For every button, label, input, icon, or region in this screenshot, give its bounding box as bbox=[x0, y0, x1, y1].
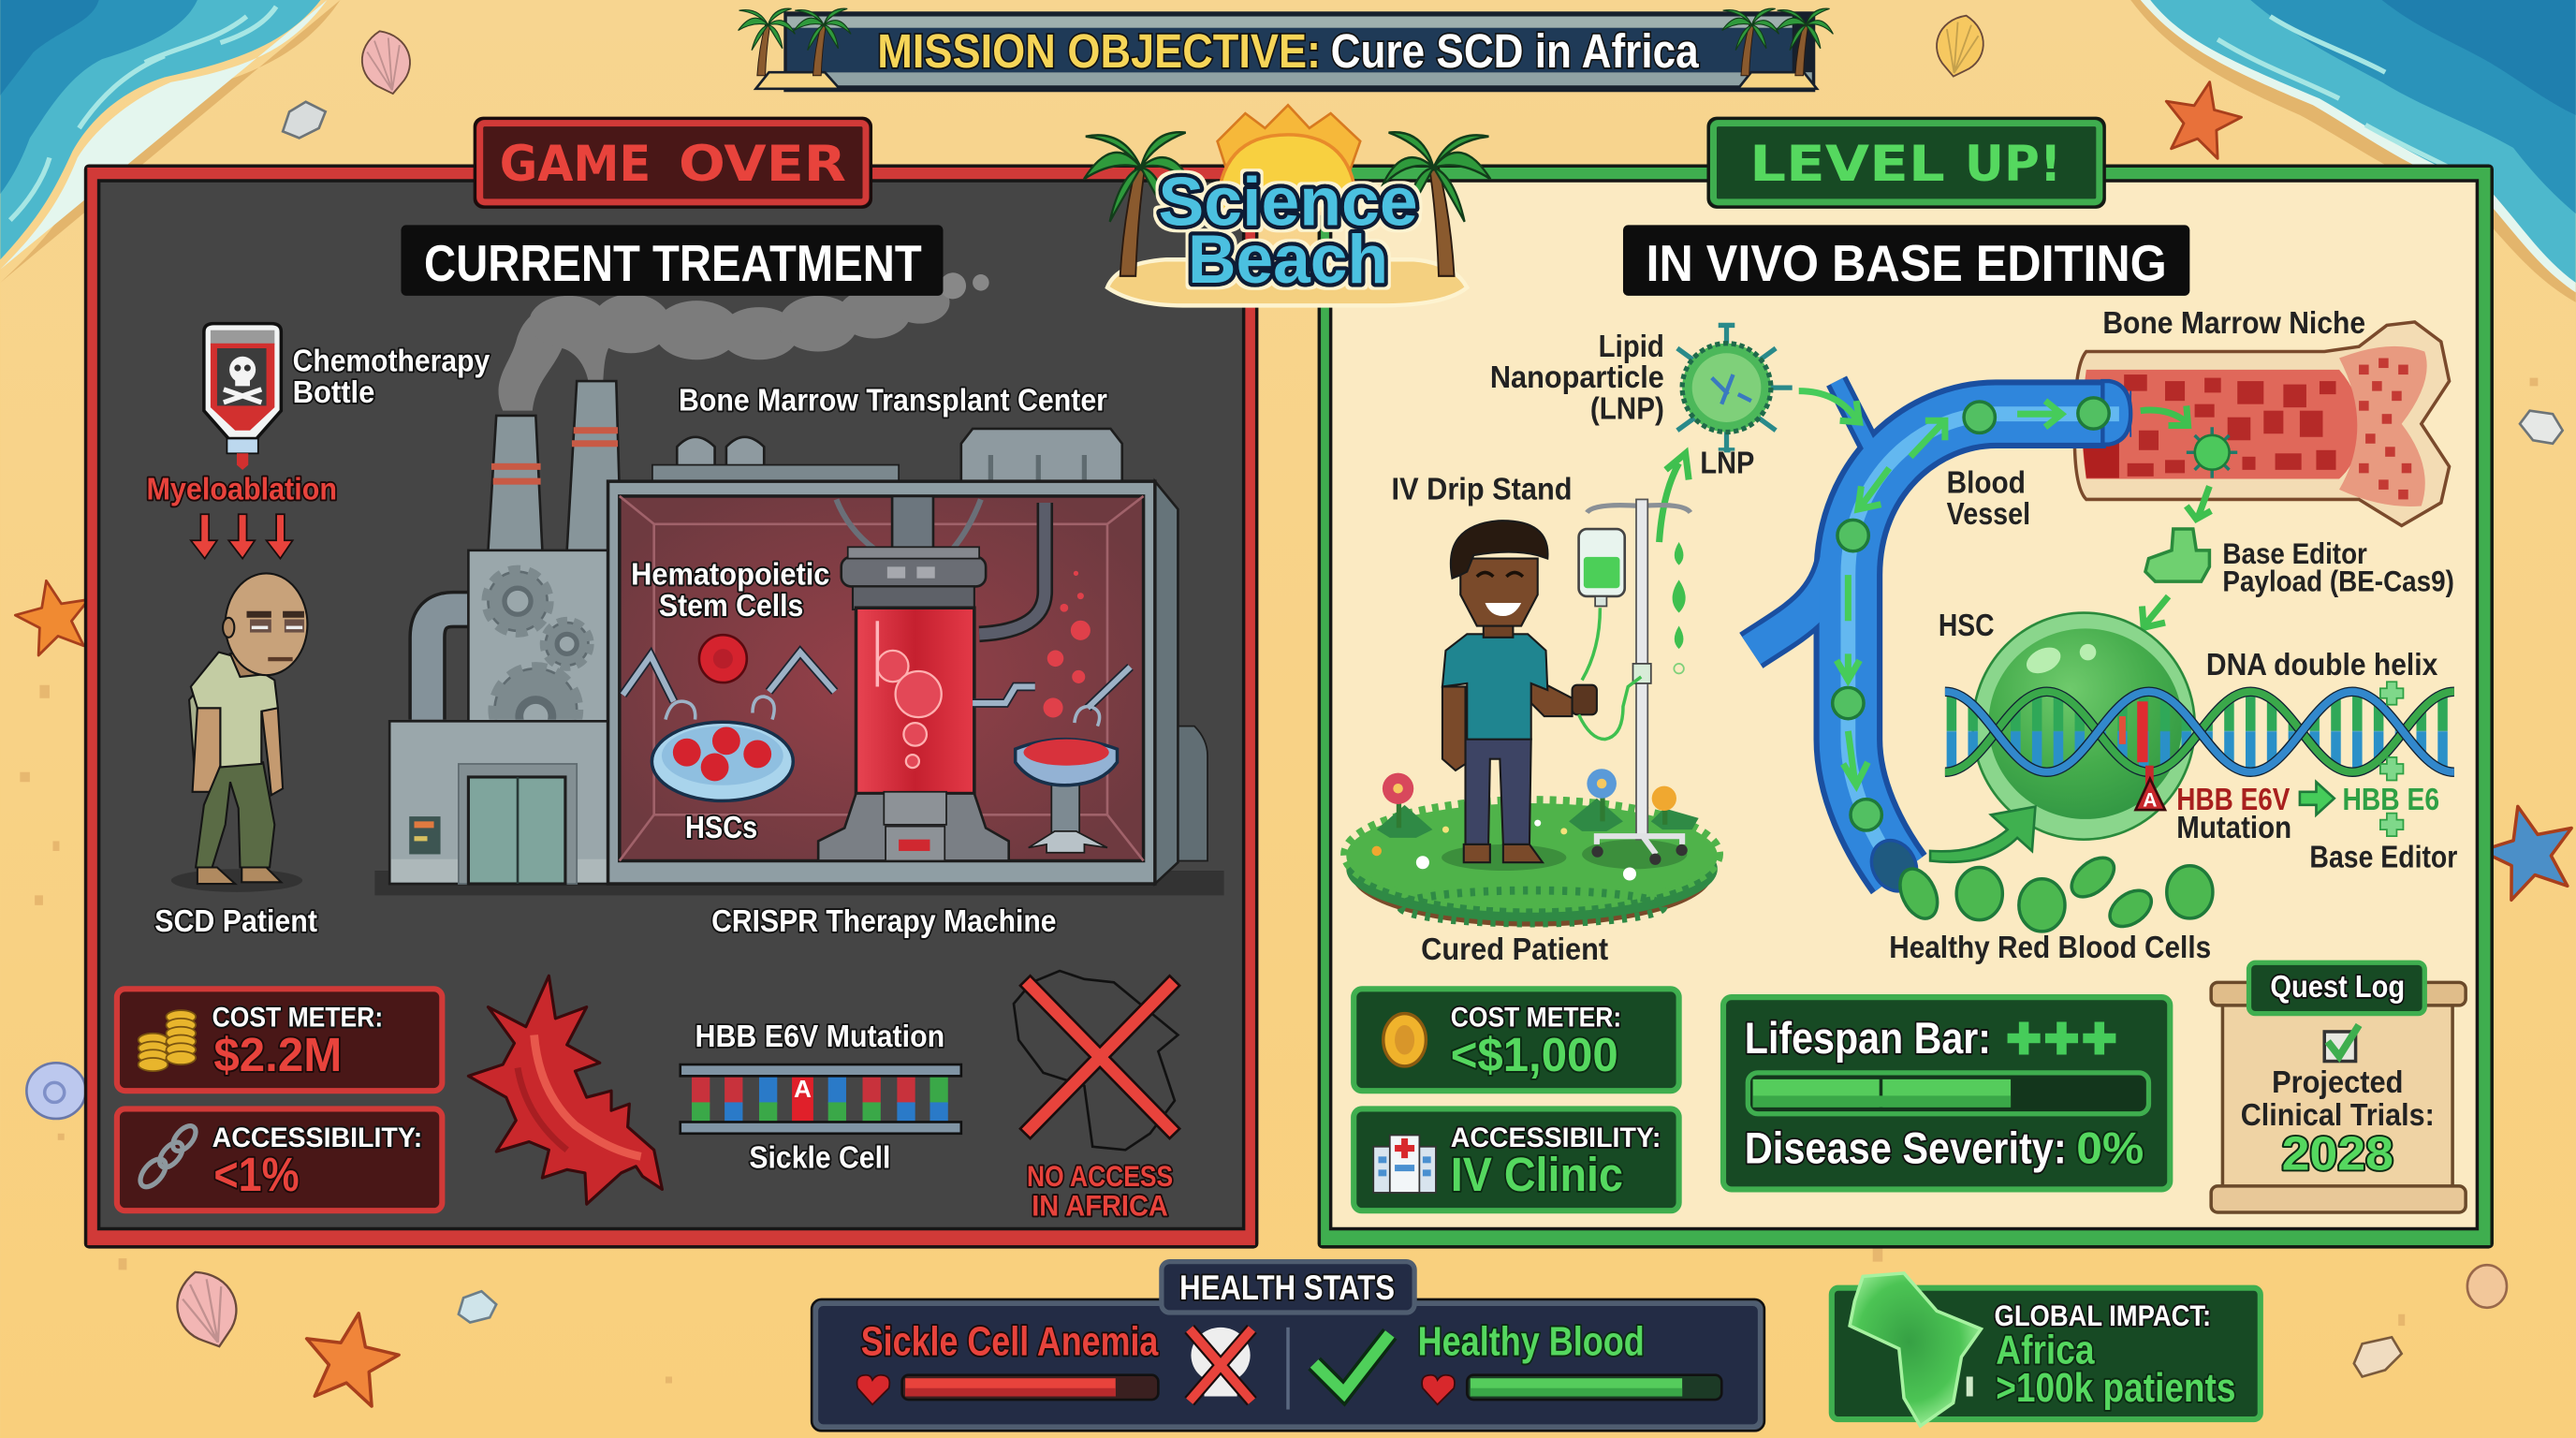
icon: gold coin bbox=[1383, 1014, 1426, 1066]
SCD patient figure bbox=[171, 573, 307, 892]
label: HSCs: HSCs bbox=[685, 811, 757, 845]
global impact panel bbox=[1832, 1273, 2261, 1426]
decor: orange starfish bottom bbox=[297, 1305, 404, 1409]
label: lipid nanoparticle: (LNP) bbox=[1590, 391, 1664, 426]
icon: green check fill bbox=[1314, 1334, 1390, 1393]
health stats panel bbox=[812, 1262, 1764, 1431]
label: base editor payload: Base Editor bbox=[2222, 536, 2367, 570]
value: 2028: 2028 bbox=[2282, 1126, 2393, 1180]
science beach logo bbox=[1084, 105, 1490, 305]
flow arrows in vessel bbox=[1799, 391, 2061, 785]
decor: yellow shell bbox=[1931, 11, 1989, 81]
label: base editor payload bbox=[2222, 536, 2454, 598]
arrows: into marrow and out bbox=[2141, 405, 2211, 627]
machine box frame bbox=[1155, 481, 1178, 884]
machine interior bbox=[620, 496, 1144, 860]
panel: in vivo base editing (level up) bbox=[1318, 118, 2494, 1249]
accessibility label: ACCESSIBILITY: bbox=[1451, 1123, 1661, 1153]
icon: base editor payload bbox=[2145, 529, 2209, 581]
DNA ladder bbox=[681, 1064, 961, 1134]
stat box: accessibility IV clinic bbox=[1354, 1108, 1679, 1211]
heading: current treatment: CURRENT TREATMENT bbox=[424, 235, 922, 292]
icon: skull crossed out bbox=[1190, 1328, 1251, 1401]
quest log tab: Quest Log bbox=[2270, 970, 2405, 1005]
sea: top left bbox=[0, 0, 341, 283]
factory bbox=[374, 381, 1224, 895]
health stats tab: HEALTH STATS bbox=[1179, 1269, 1395, 1307]
level up tab: LEVEL bbox=[1749, 136, 1945, 193]
label: global impact: GLOBAL IMPACT: bbox=[1995, 1299, 2211, 1332]
stat box: cost meter <$1,000 bbox=[1354, 989, 1679, 1091]
healthy bar bbox=[1467, 1375, 1721, 1400]
green plus signs: base editor bbox=[2380, 682, 2403, 836]
label: base editor: Base Editor bbox=[2309, 840, 2457, 874]
banner palms bbox=[739, 8, 1833, 76]
label: HBB E6: HBB E6 bbox=[2343, 783, 2439, 817]
label: myeloablation: Myeloablation bbox=[146, 472, 337, 506]
decor: pink shell top left bbox=[357, 26, 417, 98]
icon: lipid nanoparticle bbox=[1677, 325, 1793, 450]
value: patients: >100k patients bbox=[1996, 1365, 2235, 1411]
icon: gold coins bbox=[139, 1010, 196, 1071]
healthy red blood cells bbox=[1893, 850, 2213, 933]
label: hematopoietic stem cells: Hematopoietic bbox=[631, 558, 829, 593]
label: chemotherapy bottle: Bottle bbox=[293, 375, 374, 410]
blood vessel bbox=[1751, 381, 2130, 899]
quest log scroll bbox=[2211, 962, 2466, 1212]
label: LNP: LNP bbox=[1700, 446, 1754, 480]
HSC petri dish bbox=[651, 722, 793, 800]
icon: check box bbox=[2324, 1025, 2359, 1062]
sickle health bar bbox=[902, 1375, 1158, 1400]
decor: pale blue stone bbox=[459, 1291, 496, 1323]
icon: broken chain bbox=[136, 1122, 200, 1192]
accessibility value: <1% bbox=[213, 1148, 300, 1201]
icon: glowing Africa bbox=[1850, 1273, 1981, 1426]
sea: top right bbox=[2130, 0, 2576, 302]
label: HBB E6V mutation bbox=[2176, 783, 2291, 845]
LNP in marrow bbox=[2187, 427, 2237, 478]
arrow: mutation to corrected bbox=[2300, 782, 2334, 814]
cured patient figure bbox=[1442, 521, 1597, 862]
level up tab bbox=[1708, 118, 2104, 207]
banner heading: MISSION OBJECTIVE: bbox=[877, 24, 1321, 78]
logo sun bbox=[1218, 105, 1360, 213]
health stats tab bbox=[1162, 1262, 1414, 1313]
lifespan bar panel bbox=[1723, 997, 2170, 1189]
icon: heart bbox=[1422, 1375, 1455, 1404]
label: lipid nanoparticle: Nanoparticle bbox=[1490, 360, 1664, 395]
decor: blue spiral shell bbox=[26, 1063, 86, 1119]
panel: current treatment (game over) bbox=[84, 118, 1258, 1249]
small dish on stand bbox=[1016, 740, 1118, 853]
plus signs bbox=[2008, 1021, 2115, 1055]
icon: sickle cell bbox=[468, 976, 662, 1204]
mutation marker bbox=[2135, 766, 2165, 812]
value: Africa: Africa bbox=[1996, 1327, 2095, 1372]
game over tab: GAME bbox=[500, 136, 651, 193]
green drops bbox=[1673, 542, 1686, 673]
lifespan meter bbox=[1748, 1073, 2148, 1114]
IV stand bbox=[1579, 499, 1690, 865]
arrow: HSC to healthy cells bbox=[1930, 807, 2035, 862]
label: chemotherapy bottle bbox=[293, 345, 490, 410]
arrows: myeloablation down bbox=[191, 514, 293, 559]
icon: hospital bbox=[1373, 1136, 1436, 1193]
mission objective banner bbox=[739, 8, 1833, 92]
logo island bbox=[1107, 259, 1467, 305]
label: lipid nanoparticle bbox=[1490, 330, 1664, 426]
smoke from chimneys bbox=[499, 272, 989, 411]
accessibility label: ACCESSIBILITY: bbox=[212, 1123, 422, 1153]
quest log tab bbox=[2249, 962, 2424, 1014]
game over tab bbox=[475, 118, 871, 207]
label: HBB E6V mutation: HBB E6V bbox=[2176, 783, 2290, 817]
cost meter label: COST METER: bbox=[212, 1003, 383, 1034]
pipe bbox=[428, 609, 472, 720]
label: disease severity: Disease Severity: bbox=[1745, 1123, 2067, 1173]
decor: peach shell right bbox=[2467, 1265, 2507, 1308]
label: blood vessel bbox=[1947, 465, 2030, 532]
chemotherapy bottle bbox=[204, 324, 281, 470]
LNP particles in vessel bbox=[1833, 398, 2109, 830]
label: no access in Africa bbox=[1027, 1159, 1173, 1222]
banner heading bbox=[877, 24, 1699, 78]
label: cured patient: Cured Patient bbox=[1421, 932, 1608, 967]
label: SCD patient: SCD Patient bbox=[154, 904, 317, 939]
arrow: drip to LNP bbox=[1660, 453, 1689, 542]
flowers bbox=[1371, 769, 1699, 881]
hematopoietic stem cell and claws bbox=[622, 635, 1131, 726]
label: HBB E6V mutation: HBB E6V Mutation bbox=[695, 1020, 944, 1054]
decor: blue starfish right bbox=[2472, 795, 2576, 904]
cost meter value: $2.2M bbox=[213, 1028, 342, 1081]
label: bone marrow niche: Bone Marrow Niche bbox=[2102, 306, 2365, 341]
label: lifespan bar: Lifespan Bar: bbox=[1745, 1014, 1991, 1064]
label: healthy blood: Healthy Blood bbox=[1418, 1319, 1645, 1365]
label: CRISPR therapy machine: CRISPR Therapy Machine bbox=[711, 904, 1057, 939]
icon: Africa crossed out bbox=[1014, 971, 1178, 1150]
mutation marker: A bbox=[2143, 790, 2157, 812]
stat box: cost meter $2.2M bbox=[117, 989, 442, 1091]
label: DNA double helix: DNA double helix bbox=[2206, 648, 2438, 682]
label: sickle cell: Sickle Cell bbox=[749, 1141, 890, 1176]
label: chemotherapy bottle: Chemotherapy bbox=[293, 345, 490, 379]
label: HBB E6V mutation: Mutation bbox=[2176, 811, 2291, 845]
banner heading: Cure SCD in Africa bbox=[1331, 24, 1699, 78]
decor: pink shell bottom bbox=[168, 1263, 247, 1356]
level up tab: UP! bbox=[1965, 136, 2061, 193]
label: no access in Africa: NO ACCESS bbox=[1027, 1159, 1173, 1193]
text: projected clinical trials bbox=[2241, 1065, 2435, 1133]
game over tab: OVER bbox=[679, 136, 846, 193]
logo wordmark: Science bbox=[1158, 162, 1418, 240]
cost meter value: <$1,000 bbox=[1451, 1028, 1618, 1081]
decor: white stone right bbox=[2520, 411, 2563, 444]
label: healthy red blood cells: Healthy Red Blood Cells bbox=[1889, 931, 2211, 965]
side tank bbox=[1178, 726, 1208, 860]
logo wordmark: Beach bbox=[1188, 220, 1388, 298]
icon: heart red bbox=[856, 1375, 889, 1404]
stat box: accessibility <1% bbox=[117, 1108, 442, 1211]
label: blood vessel: Vessel bbox=[1947, 497, 2030, 532]
icon: green check bbox=[1314, 1334, 1390, 1393]
grass island bbox=[1345, 769, 1720, 927]
label: lipid nanoparticle: Lipid bbox=[1599, 330, 1664, 364]
decor: orange starfish top right bbox=[2157, 74, 2247, 162]
label: base editor payload: Payload (BE-Cas9) bbox=[2222, 565, 2454, 598]
lower building with door bbox=[389, 721, 608, 884]
text: projected clinical trials: Projected bbox=[2272, 1065, 2403, 1100]
CRISPR therapy reactor bbox=[818, 496, 1045, 860]
divider bbox=[1286, 1328, 1290, 1410]
floating red bubbles bbox=[1044, 571, 1090, 717]
heading: in vivo base editing: IN VIVO BASE EDITING bbox=[1647, 235, 2167, 292]
DNA double helix bbox=[1945, 692, 2454, 812]
bone marrow niche bbox=[2074, 322, 2450, 526]
chimneys bbox=[488, 381, 622, 550]
cost meter label: COST METER: bbox=[1451, 1003, 1621, 1034]
label: no access in Africa: IN AFRICA bbox=[1032, 1188, 1168, 1222]
decor: grey stone bbox=[283, 102, 326, 138]
decor: tan stone right bbox=[2354, 1337, 2402, 1376]
base letter: mutated A: A bbox=[794, 1075, 812, 1103]
label: blood vessel: Blood bbox=[1947, 465, 2026, 500]
label: bone marrow transplant center: Bone Marrow Transplant Center bbox=[679, 384, 1107, 418]
logo wordmark bbox=[1158, 162, 1418, 298]
label: hematopoietic stem cells bbox=[631, 558, 829, 624]
HSC sphere bbox=[1973, 613, 2195, 840]
label: IV drip stand: IV Drip Stand bbox=[1392, 472, 1573, 506]
label: sickle cell anemia: Sickle Cell Anemia bbox=[861, 1319, 1159, 1365]
value: 0%: 0% bbox=[2076, 1123, 2144, 1173]
gear building bbox=[468, 550, 608, 723]
label: hematopoietic stem cells: Stem Cells bbox=[659, 589, 803, 624]
top tanks and unit bbox=[677, 437, 715, 481]
text: projected clinical trials: Clinical Trials: bbox=[2241, 1098, 2435, 1133]
logo palms bbox=[1084, 132, 1490, 276]
label: HSC: HSC bbox=[1939, 609, 1995, 643]
accessibility value: IV Clinic bbox=[1451, 1148, 1623, 1201]
decor: orange starfish left bbox=[9, 573, 97, 658]
